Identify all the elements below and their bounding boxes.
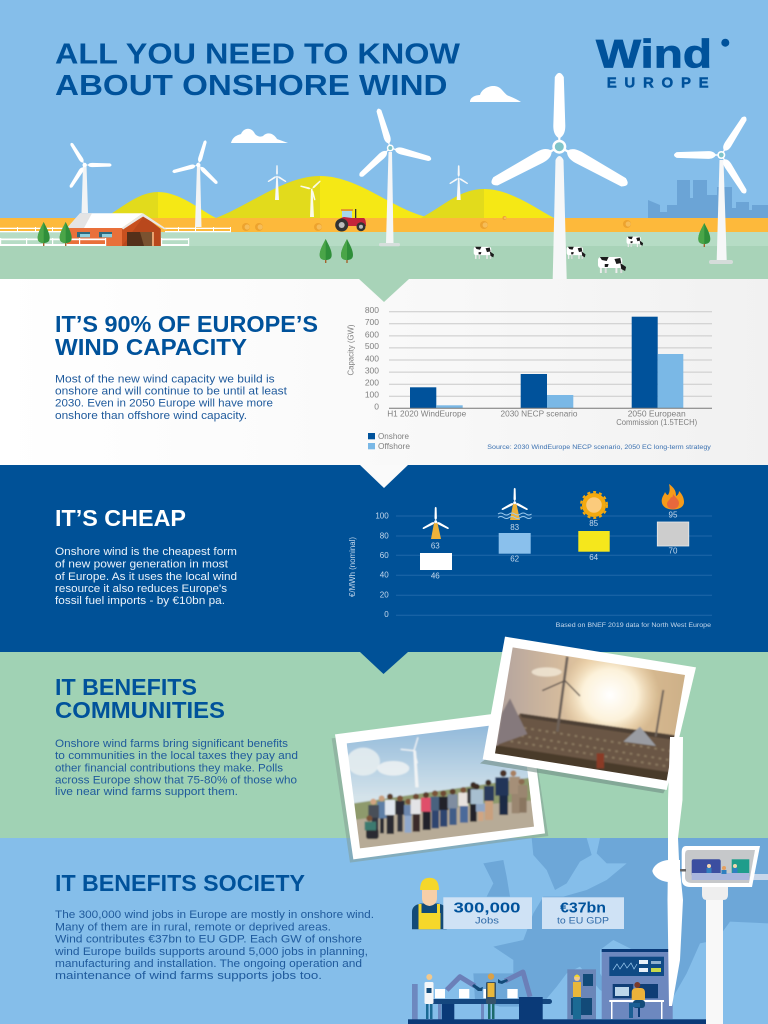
arrow: green down pointer: [359, 279, 409, 302]
hay bales: [242, 216, 631, 231]
heading: capacity: [55, 311, 318, 360]
cows: [474, 237, 643, 273]
text: cheap body: resource it also reduces Europe's: [55, 583, 227, 595]
stat: jobs: [443, 897, 532, 929]
text: capacity body: onshore and will continue to be until at least: [55, 386, 287, 398]
icon: sun: [581, 492, 607, 518]
panel: communities: [0, 652, 768, 838]
bar chart: capacity: 100: [365, 390, 379, 400]
range chart: cost per MWh: 95: [669, 511, 678, 520]
photo: festival sunset: [480, 637, 696, 793]
text: cheap body: of Europe. As it uses the local wind: [55, 571, 237, 583]
arrow: white down pointer: [360, 465, 408, 488]
range chart: cost per MWh: 70: [669, 547, 678, 556]
range chart: cost per MWh: 64: [589, 553, 599, 562]
hills: [105, 176, 554, 218]
turbine H: [674, 115, 749, 264]
text: society body: Wind contributes €37bn to EU GDP. Each GW of onshore: [55, 934, 362, 946]
text: society body: [54, 909, 374, 982]
turbine G large: [489, 73, 630, 279]
control room: [602, 949, 673, 1019]
range chart: cost per MWh: 85: [589, 519, 599, 528]
text: society body: manufacturing and installation. The ongoing operation and: [55, 958, 362, 970]
stat: GDP: to EU GDP: [557, 916, 609, 927]
icon: city skyline: [648, 180, 768, 218]
text: society body: Many of them are in rural, remote or deprived areas.: [55, 922, 331, 934]
text: society body: maintenance of wind farms supports jobs too.: [55, 970, 322, 982]
heading: communities: [55, 674, 225, 723]
bar chart: capacity: 400: [365, 353, 379, 363]
bar chart: capacity: 800: [365, 305, 379, 315]
text: communities body: live near wind farms support them.: [55, 786, 238, 798]
orange field band: [0, 218, 768, 232]
trees: [38, 222, 710, 263]
arrow: blue down pointer: [360, 652, 408, 674]
bar chart: capacity: 500: [365, 341, 379, 351]
heading: cheap: IT’S CHEAP: [55, 505, 186, 531]
worker in yellow vest: [486, 973, 496, 1019]
range chart: cost per MWh: 0: [384, 610, 389, 619]
bar chart: capacity: 300: [365, 365, 379, 375]
bar chart: capacity: [346, 305, 712, 427]
title: ALL YOU NEED TO KNOW: [55, 38, 461, 70]
stat: GDP: €37bn: [560, 901, 606, 917]
text: cheap body: Onshore wind is the cheapest form: [55, 546, 237, 558]
tractor: [335, 209, 366, 232]
chart legend: Offshore: [378, 441, 410, 451]
heading: communities: COMMUNITIES: [55, 697, 225, 723]
turbine A: [68, 142, 112, 213]
icon: onshore turbine: [422, 507, 449, 539]
bar chart: capacity: 200: [365, 378, 379, 388]
range chart: cost per MWh: 46: [431, 571, 440, 580]
turbine C: [267, 165, 287, 200]
text: communities body: other financial contributions they make. Polls: [55, 762, 283, 774]
range chart: cost per MWh: 62: [510, 554, 520, 563]
illustration: wind factory: [408, 949, 706, 1024]
text: society body: The 300,000 wind jobs in Europe are mostly in onshore wind.: [55, 909, 374, 921]
text: capacity body: onshore than offshore wind capacity.: [55, 410, 247, 422]
range chart: cost per MWh: 83: [510, 523, 520, 532]
range chart: cost per MWh: €/MWh (nominal): [348, 537, 357, 597]
turbine B: [172, 140, 219, 227]
control cabinet: [567, 969, 596, 1019]
worker in white coat: [424, 974, 434, 1019]
logo: WindEurope: Wind: [596, 32, 712, 76]
bar chart: capacity: Commission (1.5TECH): [616, 417, 697, 427]
bar chart: capacity: 0: [374, 402, 379, 412]
panel: society: [0, 838, 768, 1024]
chart source note: Based on BNEF 2019 data for North West Europe: [556, 623, 712, 629]
turbine E: [358, 108, 432, 246]
farm fence back: [0, 227, 231, 232]
bar chart: capacity: 700: [365, 317, 379, 327]
heading: communities: IT BENEFITS: [55, 674, 197, 700]
heading: capacity: IT’S 90% OF EUROPE’S: [55, 311, 318, 337]
range chart: cost per MWh: 100: [375, 511, 389, 520]
bar chart: capacity: 2050 European: [628, 409, 686, 419]
heading: capacity: WIND CAPACITY: [55, 334, 247, 360]
panel: hero landscape: [0, 0, 768, 279]
cloud: [470, 86, 521, 102]
bar chart: capacity: Capacity (GW): [346, 324, 356, 376]
logo: WindEurope: EUROPE: [607, 75, 709, 92]
range chart: cost per MWh: 60: [380, 551, 389, 560]
robot arms: [447, 972, 530, 997]
farm barn: [67, 213, 167, 246]
bar chart: capacity: 2030 NECP scenario: [500, 409, 578, 419]
text: cheap body: [55, 546, 237, 607]
chart legend: [368, 431, 410, 451]
panel: wind capacity: [0, 279, 768, 465]
stat: jobs: Jobs: [475, 916, 499, 927]
chart legend: Onshore: [378, 431, 409, 441]
text: communities body: [55, 738, 298, 798]
text: communities body: across Europe show that 75-80% of those who: [55, 774, 297, 786]
bar chart: capacity: H1 2020 WindEurope: [387, 409, 466, 419]
illustration: large turbine blade and hub: [652, 737, 683, 1006]
heading: society: IT BENEFITS SOCIETY: [55, 870, 305, 896]
turbine D: [300, 180, 321, 217]
stat: GDP: [542, 897, 624, 929]
turbine F: [449, 165, 468, 200]
bar chart: capacity: 600: [365, 329, 379, 339]
farm fence front: [0, 238, 189, 246]
text: communities body: to communities in the local taxes they pay and: [55, 750, 298, 762]
title: [55, 38, 461, 102]
illustration: nacelle cutaway and tower: [678, 846, 768, 1024]
map of Europe: [473, 838, 768, 1007]
range chart: cost per MWh: [348, 511, 712, 619]
meadow: [0, 232, 768, 279]
text: society body: wind Europe builds supports around 5,000 jobs in planning,: [54, 946, 368, 958]
panel: cheap: [0, 465, 768, 652]
range chart: cost per MWh: 40: [380, 570, 389, 579]
text: capacity body: [55, 374, 287, 422]
text: cheap body: fossil fuel imports - by €10bn pa.: [55, 595, 225, 607]
icon: offshore turbine: [498, 488, 532, 520]
logo: WindEurope: [596, 32, 729, 92]
stat: jobs: 300,000: [454, 901, 520, 917]
icon: flame: [662, 484, 684, 510]
range chart: cost per MWh: 63: [431, 542, 440, 551]
text: cheap body: of new power generation in most: [55, 558, 228, 570]
text: capacity body: Most of the new wind capacity we build is: [55, 374, 275, 386]
title: ABOUT ONSHORE WIND: [55, 70, 448, 102]
icon: worker with helmet: [412, 878, 447, 929]
text: capacity body: 2030. Even in 2050 Europe will have more: [55, 398, 273, 410]
range chart: cost per MWh: 80: [380, 531, 389, 540]
cloud small: [231, 129, 288, 143]
range chart: cost per MWh: 20: [380, 590, 389, 599]
chart source: Source: 2030 WindEurope NECP scenario, 2050 EC long-term strategy: [487, 445, 711, 451]
photo: community group: [332, 709, 548, 863]
text: communities body: Onshore wind farms bring significant benefits: [55, 738, 288, 750]
